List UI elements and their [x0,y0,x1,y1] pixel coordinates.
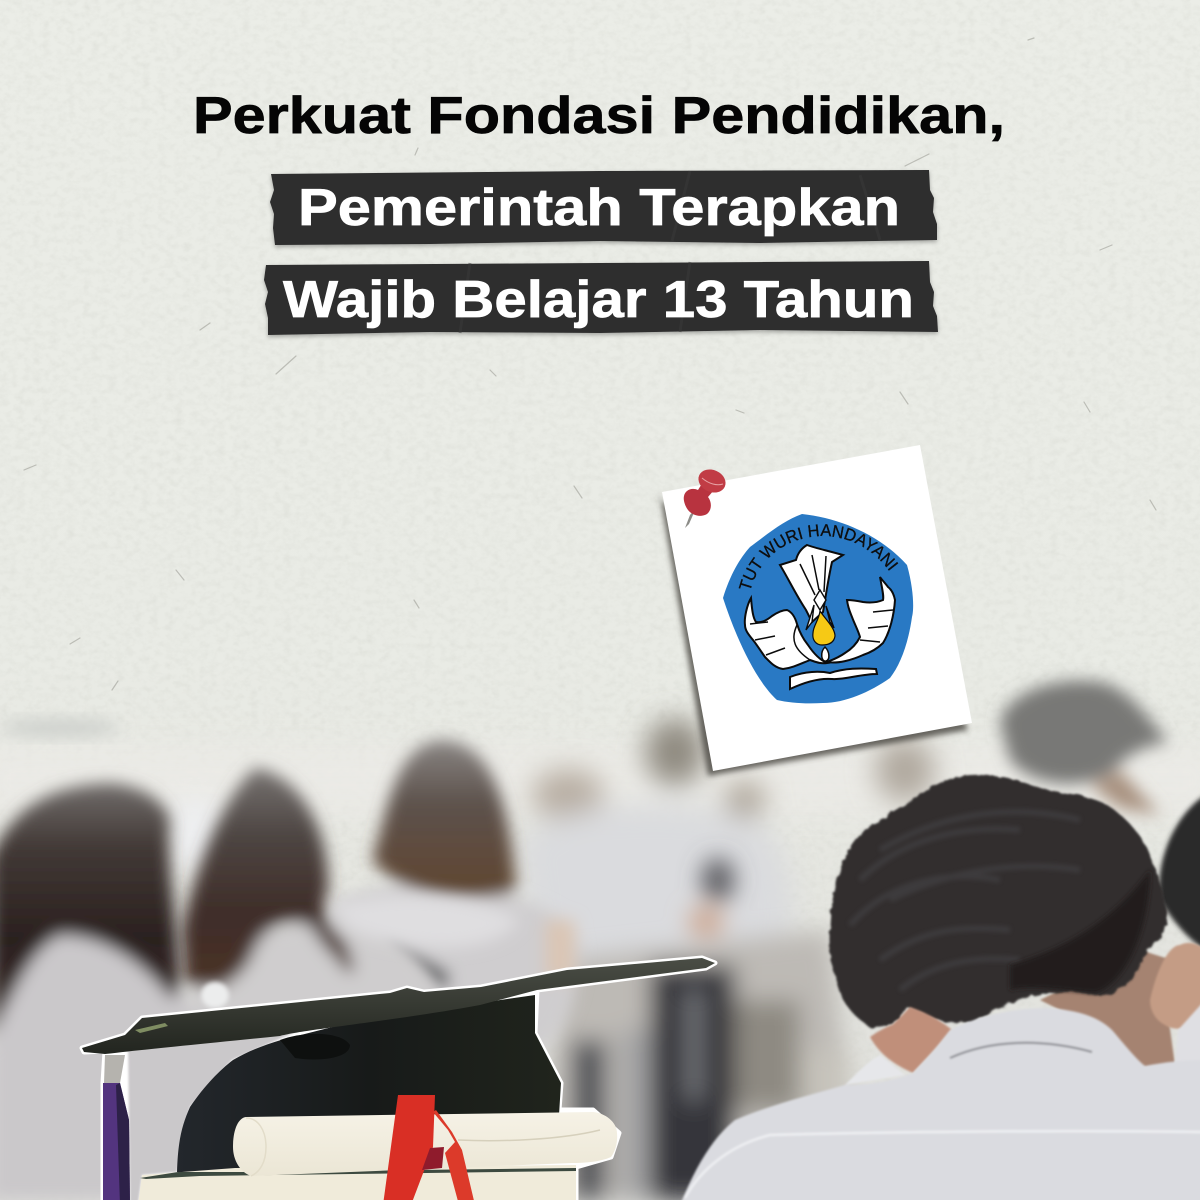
logo: Tut Wuri Handayani [723,514,914,704]
title line 1: Perkuat Fondasi Pendidikan, [193,87,1005,145]
flame [813,611,835,645]
lamp [822,647,829,661]
blurred lower middle shirt [330,895,520,948]
left wing [745,598,827,669]
neck and ear [1040,950,1175,1068]
background restore inside lower-left gaps [128,1030,300,1200]
pen feathers [780,545,843,622]
cap brim [82,958,715,1054]
white sticker outline [82,958,715,1200]
red push pin [684,465,729,528]
white note [662,445,972,771]
diploma scroll [233,1112,617,1176]
title [193,87,1005,335]
hair [829,775,1167,1027]
tassel [104,1055,125,1083]
blue shield [723,514,913,703]
pinned note with logo [656,445,972,780]
blurred far students [174,702,949,944]
blurred classroom photo [0,681,1200,1200]
blurred student: second [174,759,441,1010]
book [138,1165,576,1200]
note shadow [658,495,968,776]
hand [870,1007,952,1073]
blurred student: first [0,772,194,1200]
tape banner: Pemerintah Terapkan [270,170,937,245]
far band [2,758,1192,802]
right wing [827,577,895,663]
blurred head: top right [1000,681,1168,815]
tape banner: Pemerintah Terapkan: Pemerintah Terapkan [298,179,900,237]
tape banner: Wajib Belajar 13 Tahun [264,261,938,335]
cap dome [177,995,561,1172]
right student in focus [682,775,1200,1200]
blurred mid floor [540,858,860,1200]
tape banner: Wajib Belajar 13 Tahun: Wajib Belajar 13 Tahun [283,271,914,329]
blurred student: third [330,740,579,1050]
right student far head [1159,795,1200,950]
graduation cap, diploma and books [82,958,715,1200]
motto text [750,536,890,592]
red ribbon [383,1095,435,1200]
logo: Tut Wuri Handayani: TUT WURI HANDAYANI [738,524,898,589]
pen nib [806,590,834,630]
open book [790,668,877,689]
shirt [682,1008,1200,1200]
